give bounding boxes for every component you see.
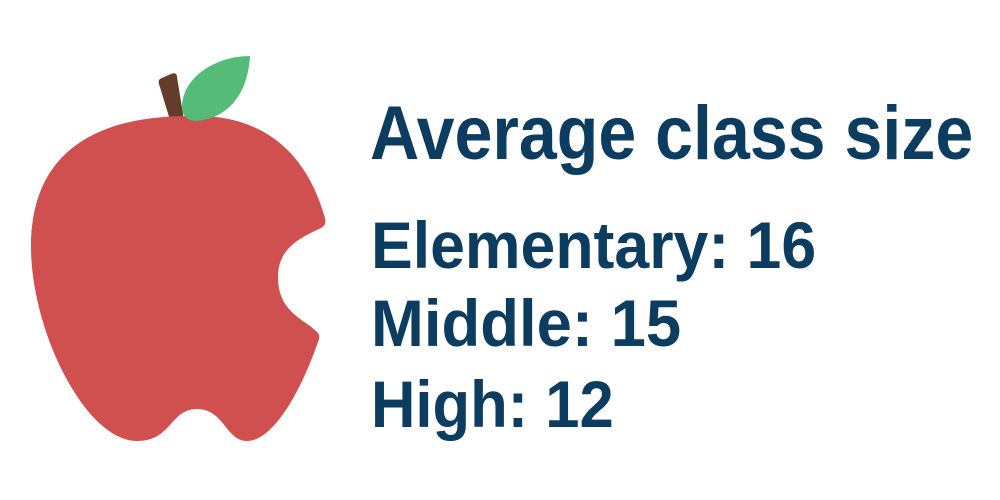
class size list (371, 208, 816, 441)
title: Average class size (370, 91, 973, 176)
apple stem (159, 73, 184, 120)
apple leaf (182, 56, 250, 121)
middle size: Middle: 15 (371, 286, 681, 360)
apple body (31, 116, 325, 441)
elementary size: Elementary: 16 (371, 208, 816, 282)
high size: High: 12 (371, 367, 614, 441)
